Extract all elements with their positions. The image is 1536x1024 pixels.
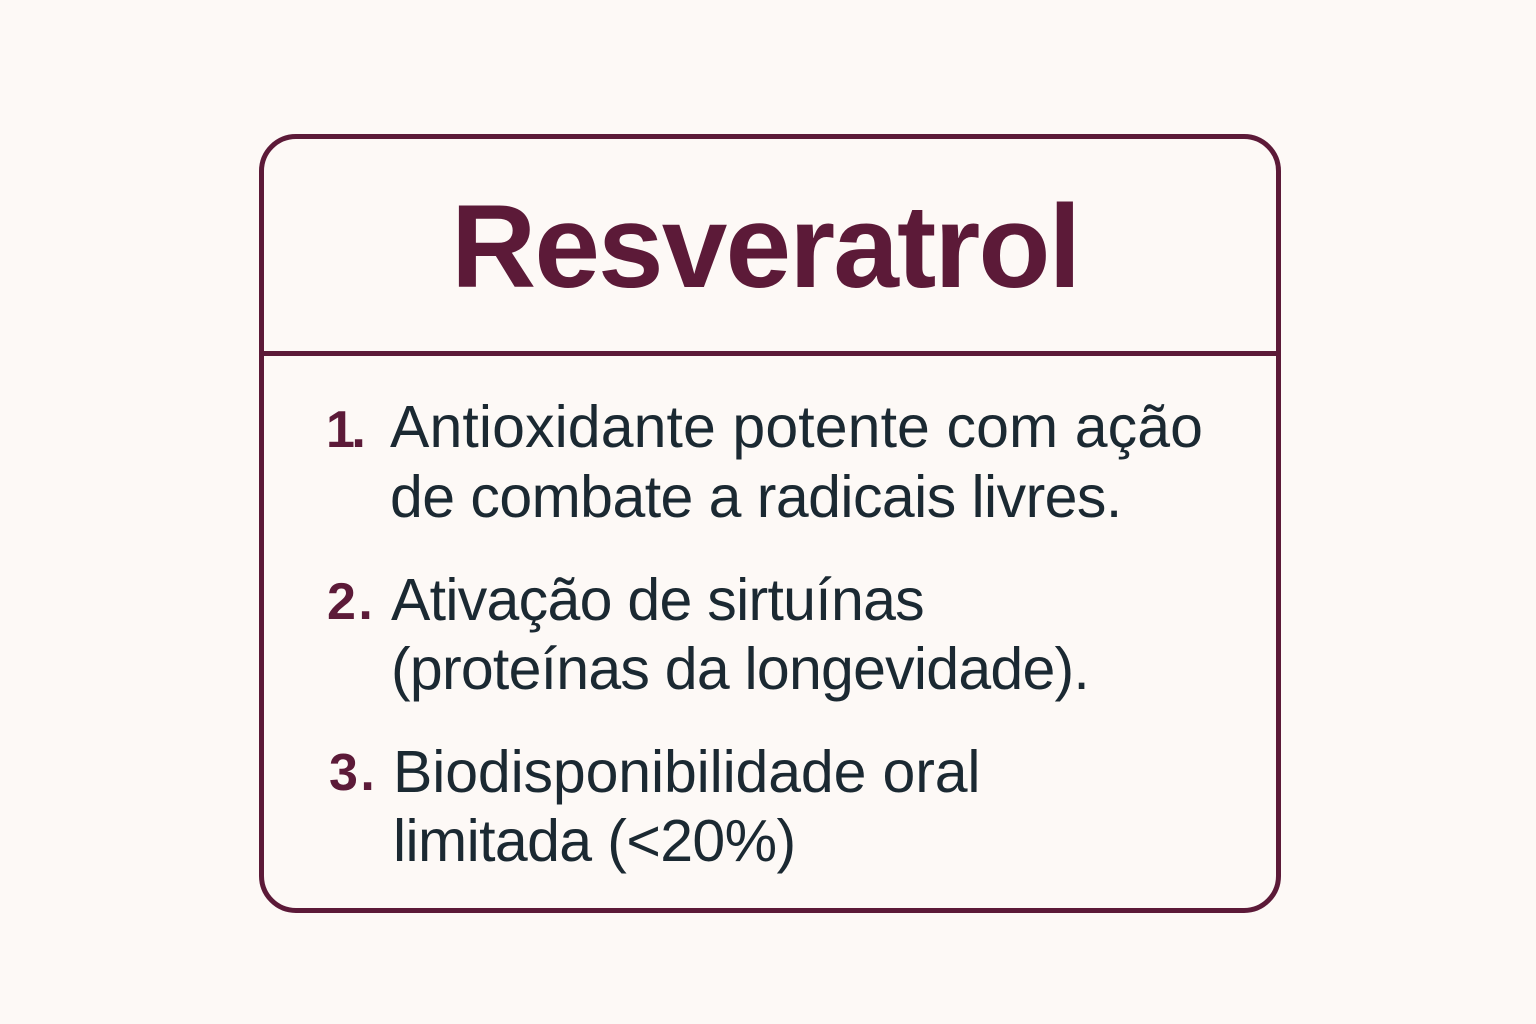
item 3 text line 1: Biodisponibilidade oral [393,739,980,805]
divider under title [261,351,1279,356]
title: Resveratrol [451,181,1079,313]
item 3 text line 2: limitada (<20%) [393,808,796,874]
item 2 text line 2: (proteínas da longevidade). [391,636,1089,702]
list item 1 [326,394,1203,530]
list item 2 [327,567,1089,702]
item 2 text line 1: Ativação de sirtuínas [391,567,924,633]
list item 3 [329,739,980,874]
item 1 text line 1: Antioxidante potente com ação [390,394,1203,460]
item 1 text line 2: de combate a radicais livres. [390,464,1122,530]
number 2: 2. [327,573,375,631]
number 3: 3. [329,744,377,802]
number 1: 1. [326,401,362,459]
panel: resveratrol card [259,134,1281,913]
